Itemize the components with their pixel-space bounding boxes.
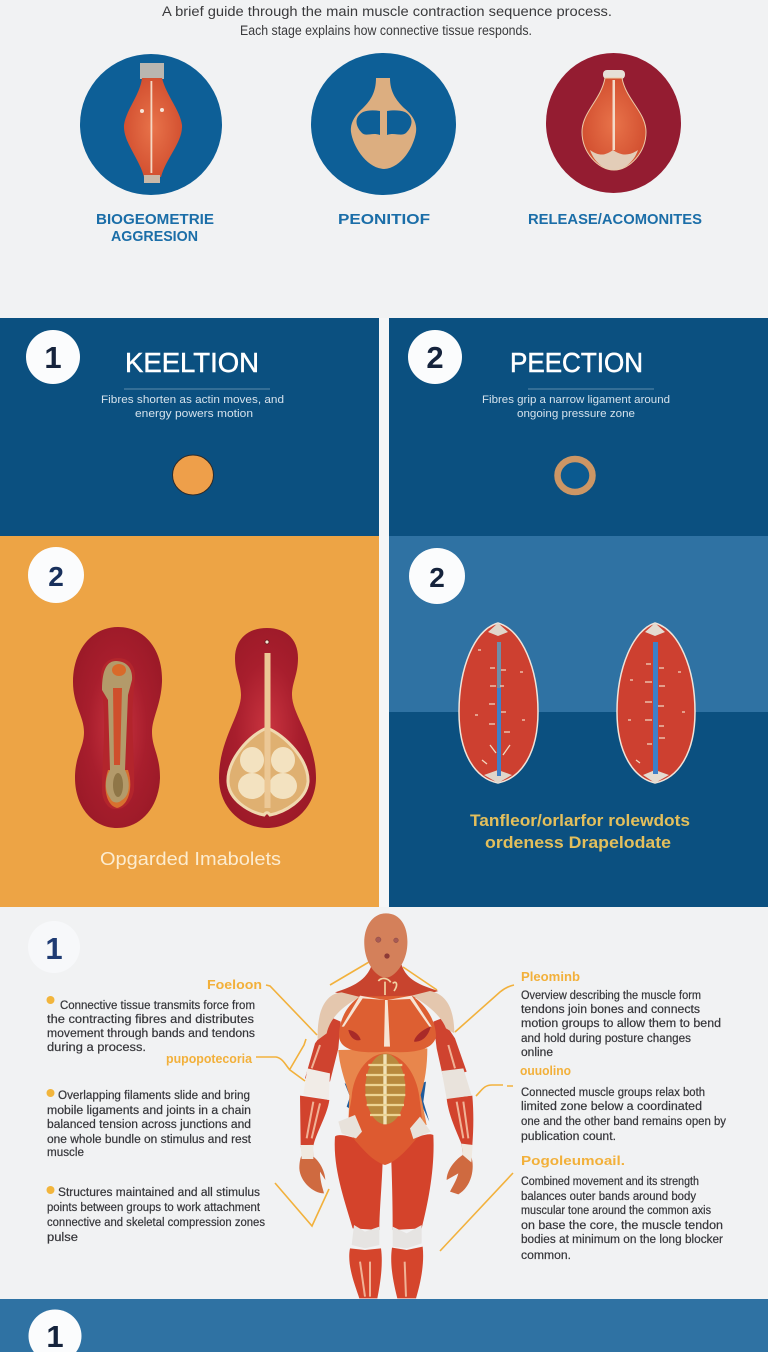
text block: pleominb: tendons join bones and connects — [521, 1004, 700, 1016]
text block: left two: mobile ligaments and joints in a chain — [47, 1105, 251, 1117]
text block: left two: Overlapping filaments slide and bring — [58, 1090, 250, 1102]
intro text: Each stage explains how connective tissue responds. — [240, 23, 532, 38]
caption: Tanfleor/orlarfor rolewdots — [470, 812, 690, 830]
text block: left three: pulse — [47, 1232, 78, 1244]
right forearm — [447, 1096, 473, 1145]
text block: left three: points between groups to work attachment — [47, 1202, 261, 1214]
right deltoid — [412, 991, 454, 1033]
right upper arm — [433, 1018, 467, 1078]
panel: orange opgarded — [0, 536, 379, 907]
text block: ouuolino — [520, 1064, 726, 1143]
icon: joint on blue circle — [311, 53, 456, 195]
illustration: right organ — [219, 628, 316, 828]
label: circle three: RELEASE/ACOMONITES — [528, 211, 702, 228]
text block: pogoleumoail: bodies at minimum on the long blocker — [521, 1234, 723, 1246]
callout label: pupopotecoria: pupopotecoria — [166, 1052, 253, 1066]
left thigh — [335, 1135, 383, 1230]
blue waist details — [345, 1082, 429, 1122]
arrow: upper right — [455, 985, 514, 1032]
abdomen and hips — [349, 1053, 422, 1165]
text block: pleominb — [521, 970, 721, 1059]
text block: left two: muscle — [47, 1147, 84, 1159]
wrist bands — [301, 1144, 473, 1162]
label: circle two: PEONITIOF — [338, 211, 430, 228]
icon: muscle on blue circle — [80, 54, 222, 195]
arrow: middle right — [476, 1085, 513, 1096]
arrow: lower right — [440, 1173, 513, 1251]
hip joints — [338, 1115, 431, 1139]
left upper arm — [305, 1018, 341, 1082]
panel: step 2 peection: ongoing pressure zone — [517, 408, 635, 420]
text block: ouuolino: Connected muscle groups relax both — [521, 1087, 705, 1099]
trapezius and neck — [335, 965, 438, 998]
text block: left three: Structures maintained and all stimulus — [58, 1187, 260, 1199]
text block: ouuolino: limited zone below a coordinated — [521, 1101, 702, 1113]
arrow: pupopotecoria — [256, 1039, 306, 1081]
panel: step 2 peection: Fibres grip a narrow ligament around — [482, 394, 670, 406]
text block: left one: during a process. — [47, 1042, 146, 1054]
text block: pogoleumoail: Pogoleumoail. — [521, 1154, 625, 1168]
text block: pleominb: motion groups to allow them to bend — [521, 1018, 721, 1030]
left hand — [299, 1144, 325, 1193]
right hand — [447, 1144, 473, 1194]
text block: pleominb: Pleominb — [521, 970, 580, 984]
text block: ouuolino: one and the other band remains open by — [521, 1116, 726, 1128]
right elbow band — [442, 1068, 472, 1099]
text block: left one: the contracting fibres and distributes — [47, 1014, 254, 1026]
text block: pleominb: Overview describing the muscle form — [521, 990, 701, 1002]
panel: blue two-tone: 2 — [429, 562, 445, 593]
neck detail — [378, 978, 397, 995]
illustration: left organ — [73, 627, 162, 828]
text block: ouuolino: ouuolino — [520, 1064, 571, 1078]
left deltoid — [318, 992, 360, 1040]
text block: pogoleumoail: Combined movement and its strength — [521, 1176, 699, 1188]
text block: pogoleumoail: on base the core, the muscle tendon — [521, 1220, 723, 1232]
label: circle one — [96, 211, 214, 245]
badge: number 1 — [28, 921, 80, 973]
arrow: neck left — [330, 962, 369, 985]
text block: pogoleumoail: muscular tone around the common axis — [521, 1205, 711, 1217]
left forearm — [300, 1096, 329, 1146]
caption: ordeness Drapelodate — [485, 834, 671, 852]
right thigh — [391, 1134, 434, 1230]
text block: left two — [46, 1089, 252, 1159]
panel: step 2 peection — [389, 318, 768, 536]
right calf — [391, 1247, 423, 1298]
panel: step 1 keeltion: Fibres shorten as actin moves, and — [101, 394, 284, 406]
intro text — [162, 4, 612, 38]
chest lines — [342, 996, 432, 1047]
chest — [339, 996, 436, 1052]
illustration: left oval muscle — [459, 623, 538, 783]
illustration: right oval muscle — [617, 623, 695, 783]
caption: Opgarded Imabolets — [100, 849, 281, 869]
human muscle figure — [299, 913, 473, 1298]
panel: step 1 keeltion — [0, 318, 379, 536]
text block: ouuolino: publication count. — [521, 1131, 616, 1143]
limb highlights — [307, 1045, 468, 1297]
left elbow band — [303, 1068, 330, 1100]
text block: left one: Connective tissue transmits force from — [60, 1000, 255, 1012]
left calf — [349, 1248, 382, 1298]
panel: step 2 peection: PEECTION — [510, 347, 643, 378]
caption — [470, 812, 690, 852]
text block: left three — [46, 1186, 265, 1244]
text block: pogoleumoail — [521, 1154, 723, 1262]
icon: muscle on red circle — [546, 53, 681, 193]
waist — [338, 1048, 427, 1125]
callout label: foeloon: Foeloon — [207, 978, 262, 992]
panel: bottom band — [0, 1299, 768, 1352]
text block: pogoleumoail: common. — [521, 1250, 571, 1262]
badge: number 1: 1 — [45, 931, 63, 966]
head — [364, 913, 407, 978]
intro text: A brief guide through the main muscle contraction sequence process. — [162, 4, 612, 19]
text block: left one — [46, 996, 255, 1054]
arrow: neck right — [403, 967, 437, 990]
text block: pogoleumoail: balances outer bands around body — [521, 1191, 696, 1203]
arrow: foeloon — [266, 985, 317, 1035]
panel: step 1 keeltion: energy powers motion — [135, 408, 253, 420]
label: circle one: AGGRESION — [111, 228, 198, 245]
text block: pleominb: online — [521, 1047, 553, 1059]
rib cage — [365, 1054, 405, 1124]
panel: orange opgarded: 2 — [48, 561, 64, 592]
text block: left one: movement through bands and tendons — [47, 1028, 255, 1040]
panel: step 2 peection: 2 — [426, 340, 444, 375]
panel: step 1 keeltion: KEELTION — [125, 347, 259, 378]
text block: left two: one whole bundle on stimulus and rest — [47, 1134, 252, 1146]
text block: left three: connective and skeletal compression zones — [47, 1217, 265, 1229]
label: circle one: BIOGEOMETRIE — [96, 211, 214, 228]
arrow: lower left — [275, 1183, 329, 1226]
panel: blue two-tone — [389, 536, 768, 907]
panel: step 1 keeltion: 1 — [44, 340, 62, 375]
pectoral marks — [348, 1027, 431, 1042]
text block: left two: balanced tension across junctions and — [47, 1119, 251, 1131]
text block: pleominb: and hold during posture changes — [521, 1033, 691, 1045]
knee caps — [352, 1225, 422, 1248]
